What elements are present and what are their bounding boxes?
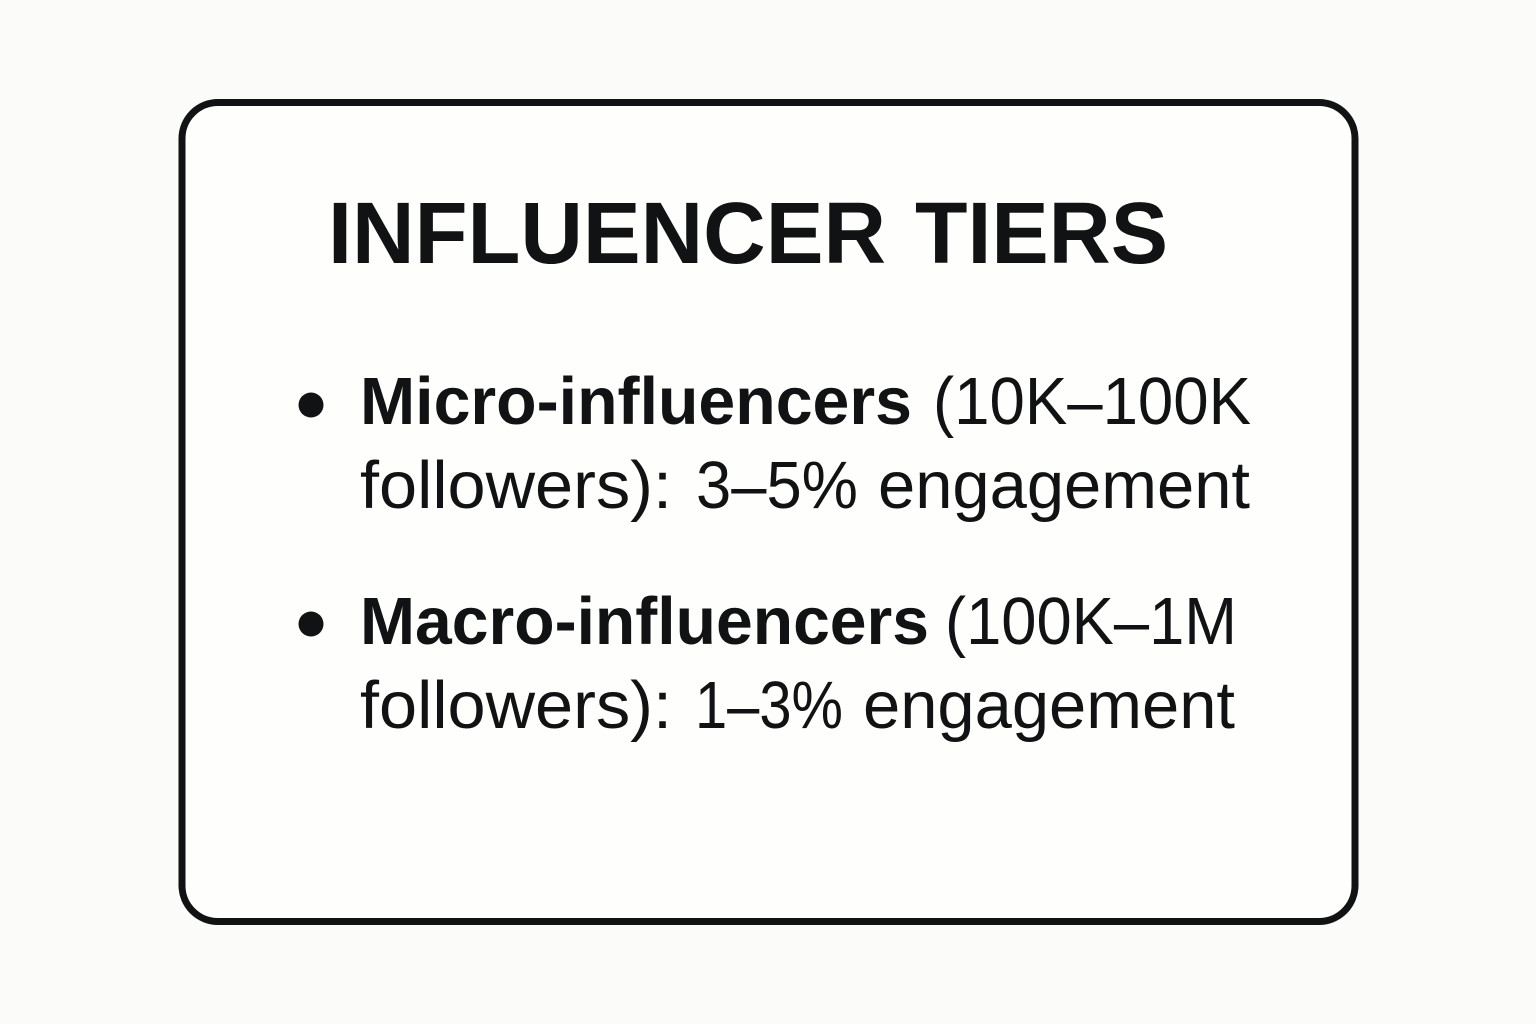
engagement: macro: followers): — [360, 668, 672, 743]
follower range: macro: (100K–1M — [945, 584, 1237, 659]
engagement: macro: 1–3% — [695, 668, 843, 743]
engagement: micro: followers): — [360, 448, 672, 523]
label: macro-influencers: Macro-influencers — [360, 584, 929, 659]
engagement: micro — [360, 448, 1250, 523]
title: TIERS — [915, 185, 1168, 282]
engagement: micro: engagement — [878, 448, 1250, 523]
follower range: micro: (10K–100K — [933, 364, 1251, 439]
engagement: macro — [360, 668, 1235, 743]
engagement: micro: 3–5% — [696, 448, 858, 523]
list item: micro-influencers — [298, 364, 1251, 523]
title — [328, 185, 1168, 282]
bullet: macro-influencers — [298, 612, 324, 636]
panel: influencer tiers card — [182, 102, 1355, 922]
label: micro-influencers: Micro-influencers — [360, 364, 912, 439]
title: INFLUENCER — [328, 185, 886, 282]
bullet: micro-influencers — [298, 392, 324, 418]
engagement: macro: engagement — [863, 668, 1235, 743]
list item: macro-influencers — [298, 584, 1237, 743]
